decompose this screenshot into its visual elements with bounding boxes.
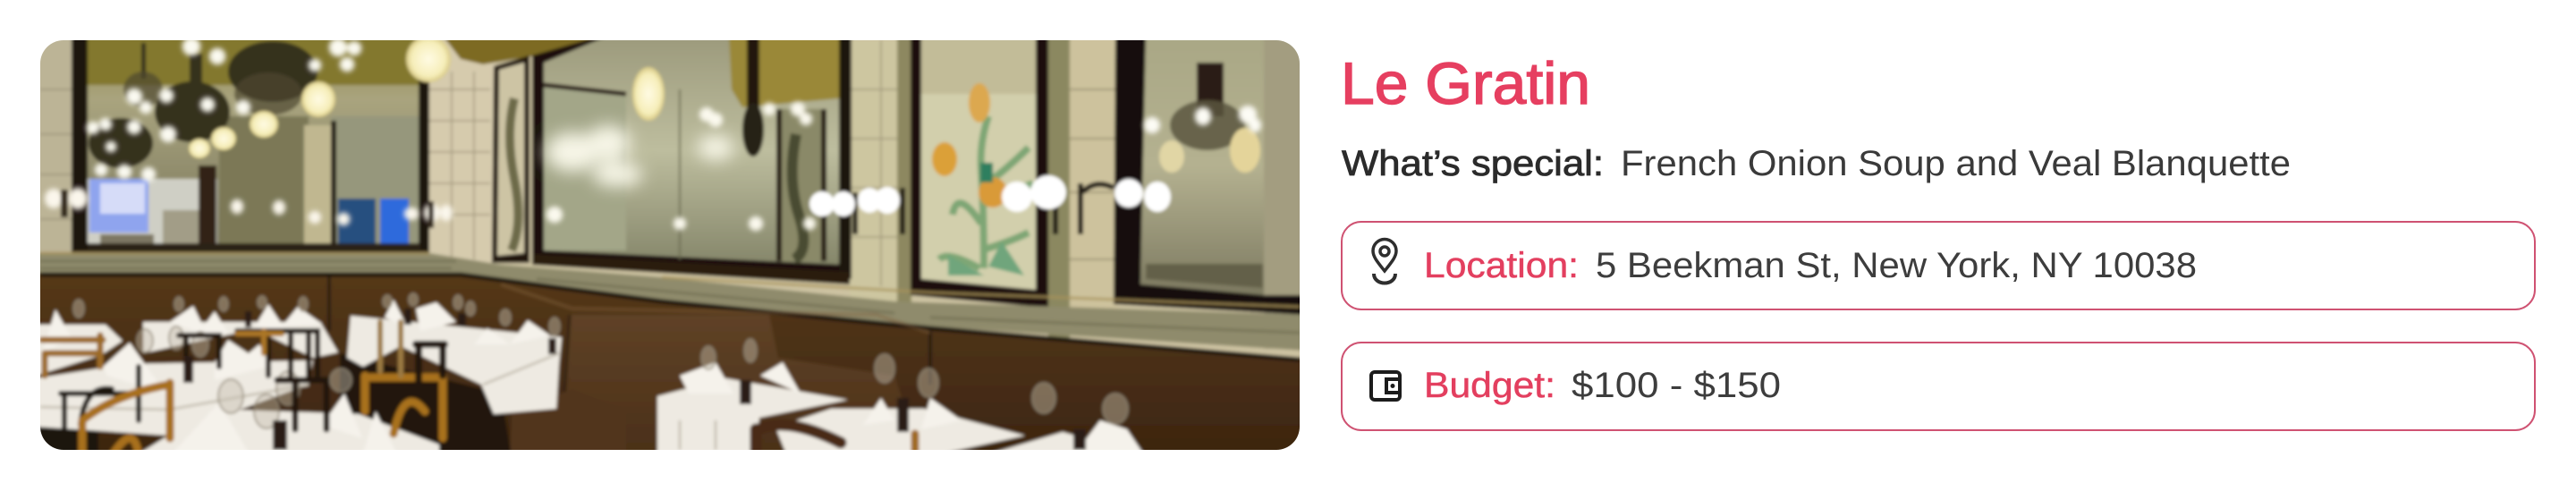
narrow floral panel (492, 55, 530, 263)
panel: budget (1342, 343, 2535, 430)
location text: 5 Beekman St, New York, NY 10038 (1596, 246, 2197, 285)
what's special line: French Onion Soup and Veal Blanquette (1621, 144, 2291, 183)
what's special line: What’s special: (1342, 144, 1604, 183)
banquette leather (36, 273, 1304, 456)
sconces left (45, 188, 560, 225)
globe lamps (189, 36, 451, 158)
ceiling (444, 40, 594, 66)
wall tiles (40, 40, 1300, 360)
brass rail (40, 253, 1300, 307)
floral tile panel (897, 36, 1070, 340)
booth end (564, 314, 902, 450)
large wall sconces (809, 175, 1171, 234)
wine glasses (73, 293, 1128, 428)
dark floor (340, 353, 512, 456)
napkins (42, 300, 1145, 456)
chandelier dark masses (89, 41, 318, 168)
icon: wallet (1371, 372, 1400, 400)
photo: restaurant dining room (36, 36, 1306, 456)
what's special line (1342, 144, 2291, 183)
budget text (1424, 366, 1781, 405)
tile column (1070, 79, 1119, 243)
title: Le Gratin (1341, 50, 1590, 116)
icon: location pin (1373, 240, 1396, 283)
chairs (42, 322, 915, 456)
location text: Location: (1424, 246, 1579, 285)
mirror left (72, 36, 429, 260)
tablecloths (36, 316, 1148, 456)
budget text: Budget: (1424, 366, 1555, 405)
budget text: $100 - $150 (1572, 366, 1781, 405)
mosaic frieze (36, 253, 1304, 351)
mirror right (1114, 36, 1304, 315)
panel: location (1342, 222, 2535, 309)
pepper mills (183, 309, 1086, 450)
chandelier bulbs (87, 38, 361, 182)
mirror centre (532, 36, 852, 284)
